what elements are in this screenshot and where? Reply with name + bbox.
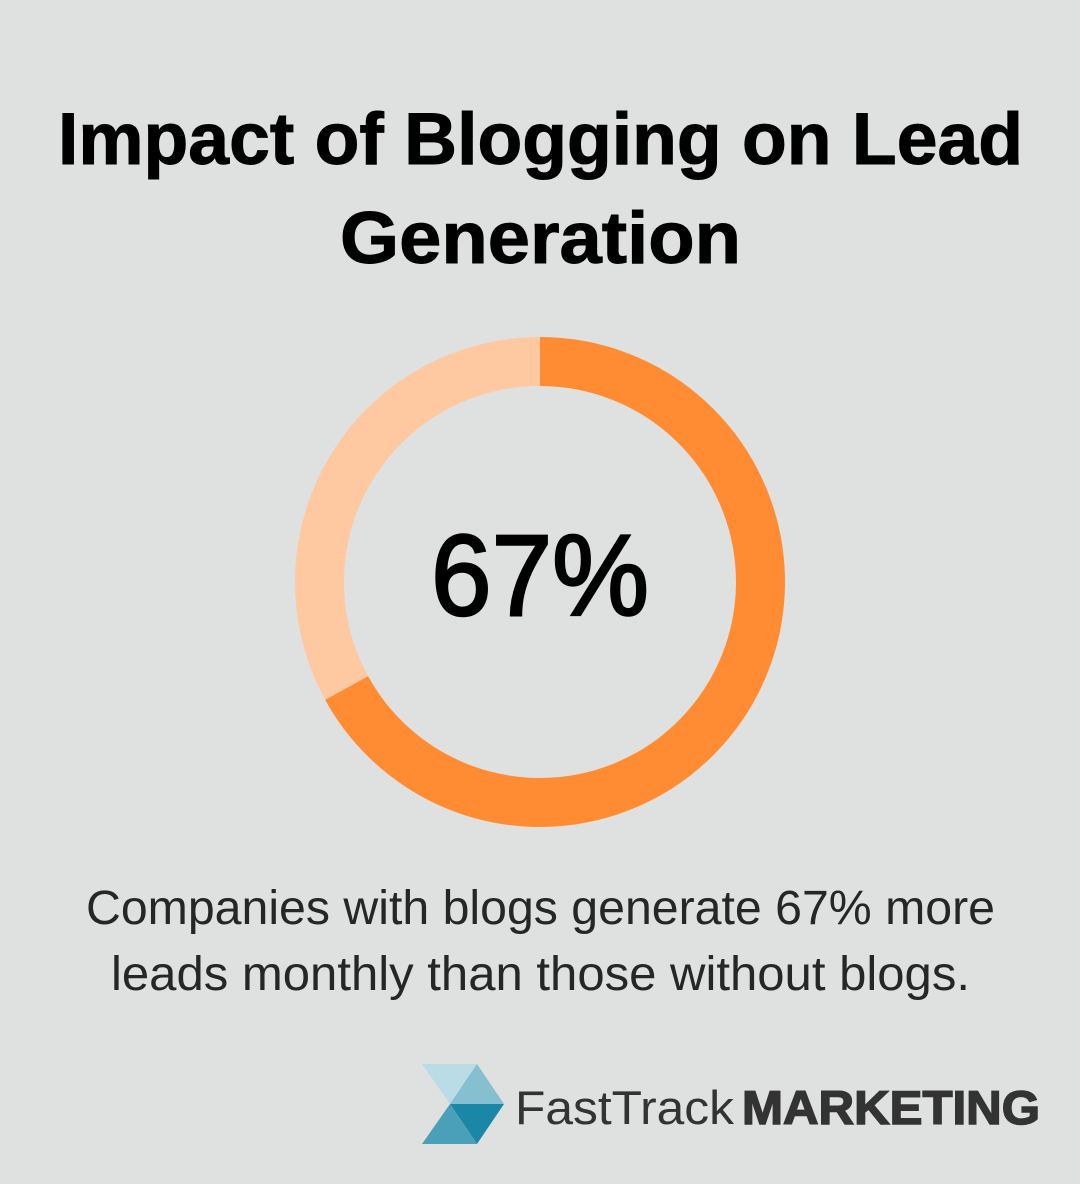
description text bbox=[86, 882, 995, 1001]
description text: Companies with blogs generate 67% more bbox=[86, 882, 995, 935]
title: Impact of Blogging on Lead bbox=[58, 99, 1023, 180]
title bbox=[58, 99, 1023, 279]
logo wordmark: MARKETING bbox=[742, 1081, 1040, 1134]
icon: logo arrow mark bbox=[422, 1064, 504, 1144]
donut chart: 67% bbox=[320, 362, 760, 802]
title: Generation bbox=[340, 198, 741, 279]
logo wordmark bbox=[515, 1081, 1040, 1134]
donut centre value: 67% bbox=[431, 512, 649, 640]
logo: FastTrack Marketing bbox=[422, 1064, 1040, 1144]
logo wordmark: FastTrack bbox=[515, 1081, 735, 1134]
description text: leads monthly than those without blogs. bbox=[111, 948, 970, 1001]
